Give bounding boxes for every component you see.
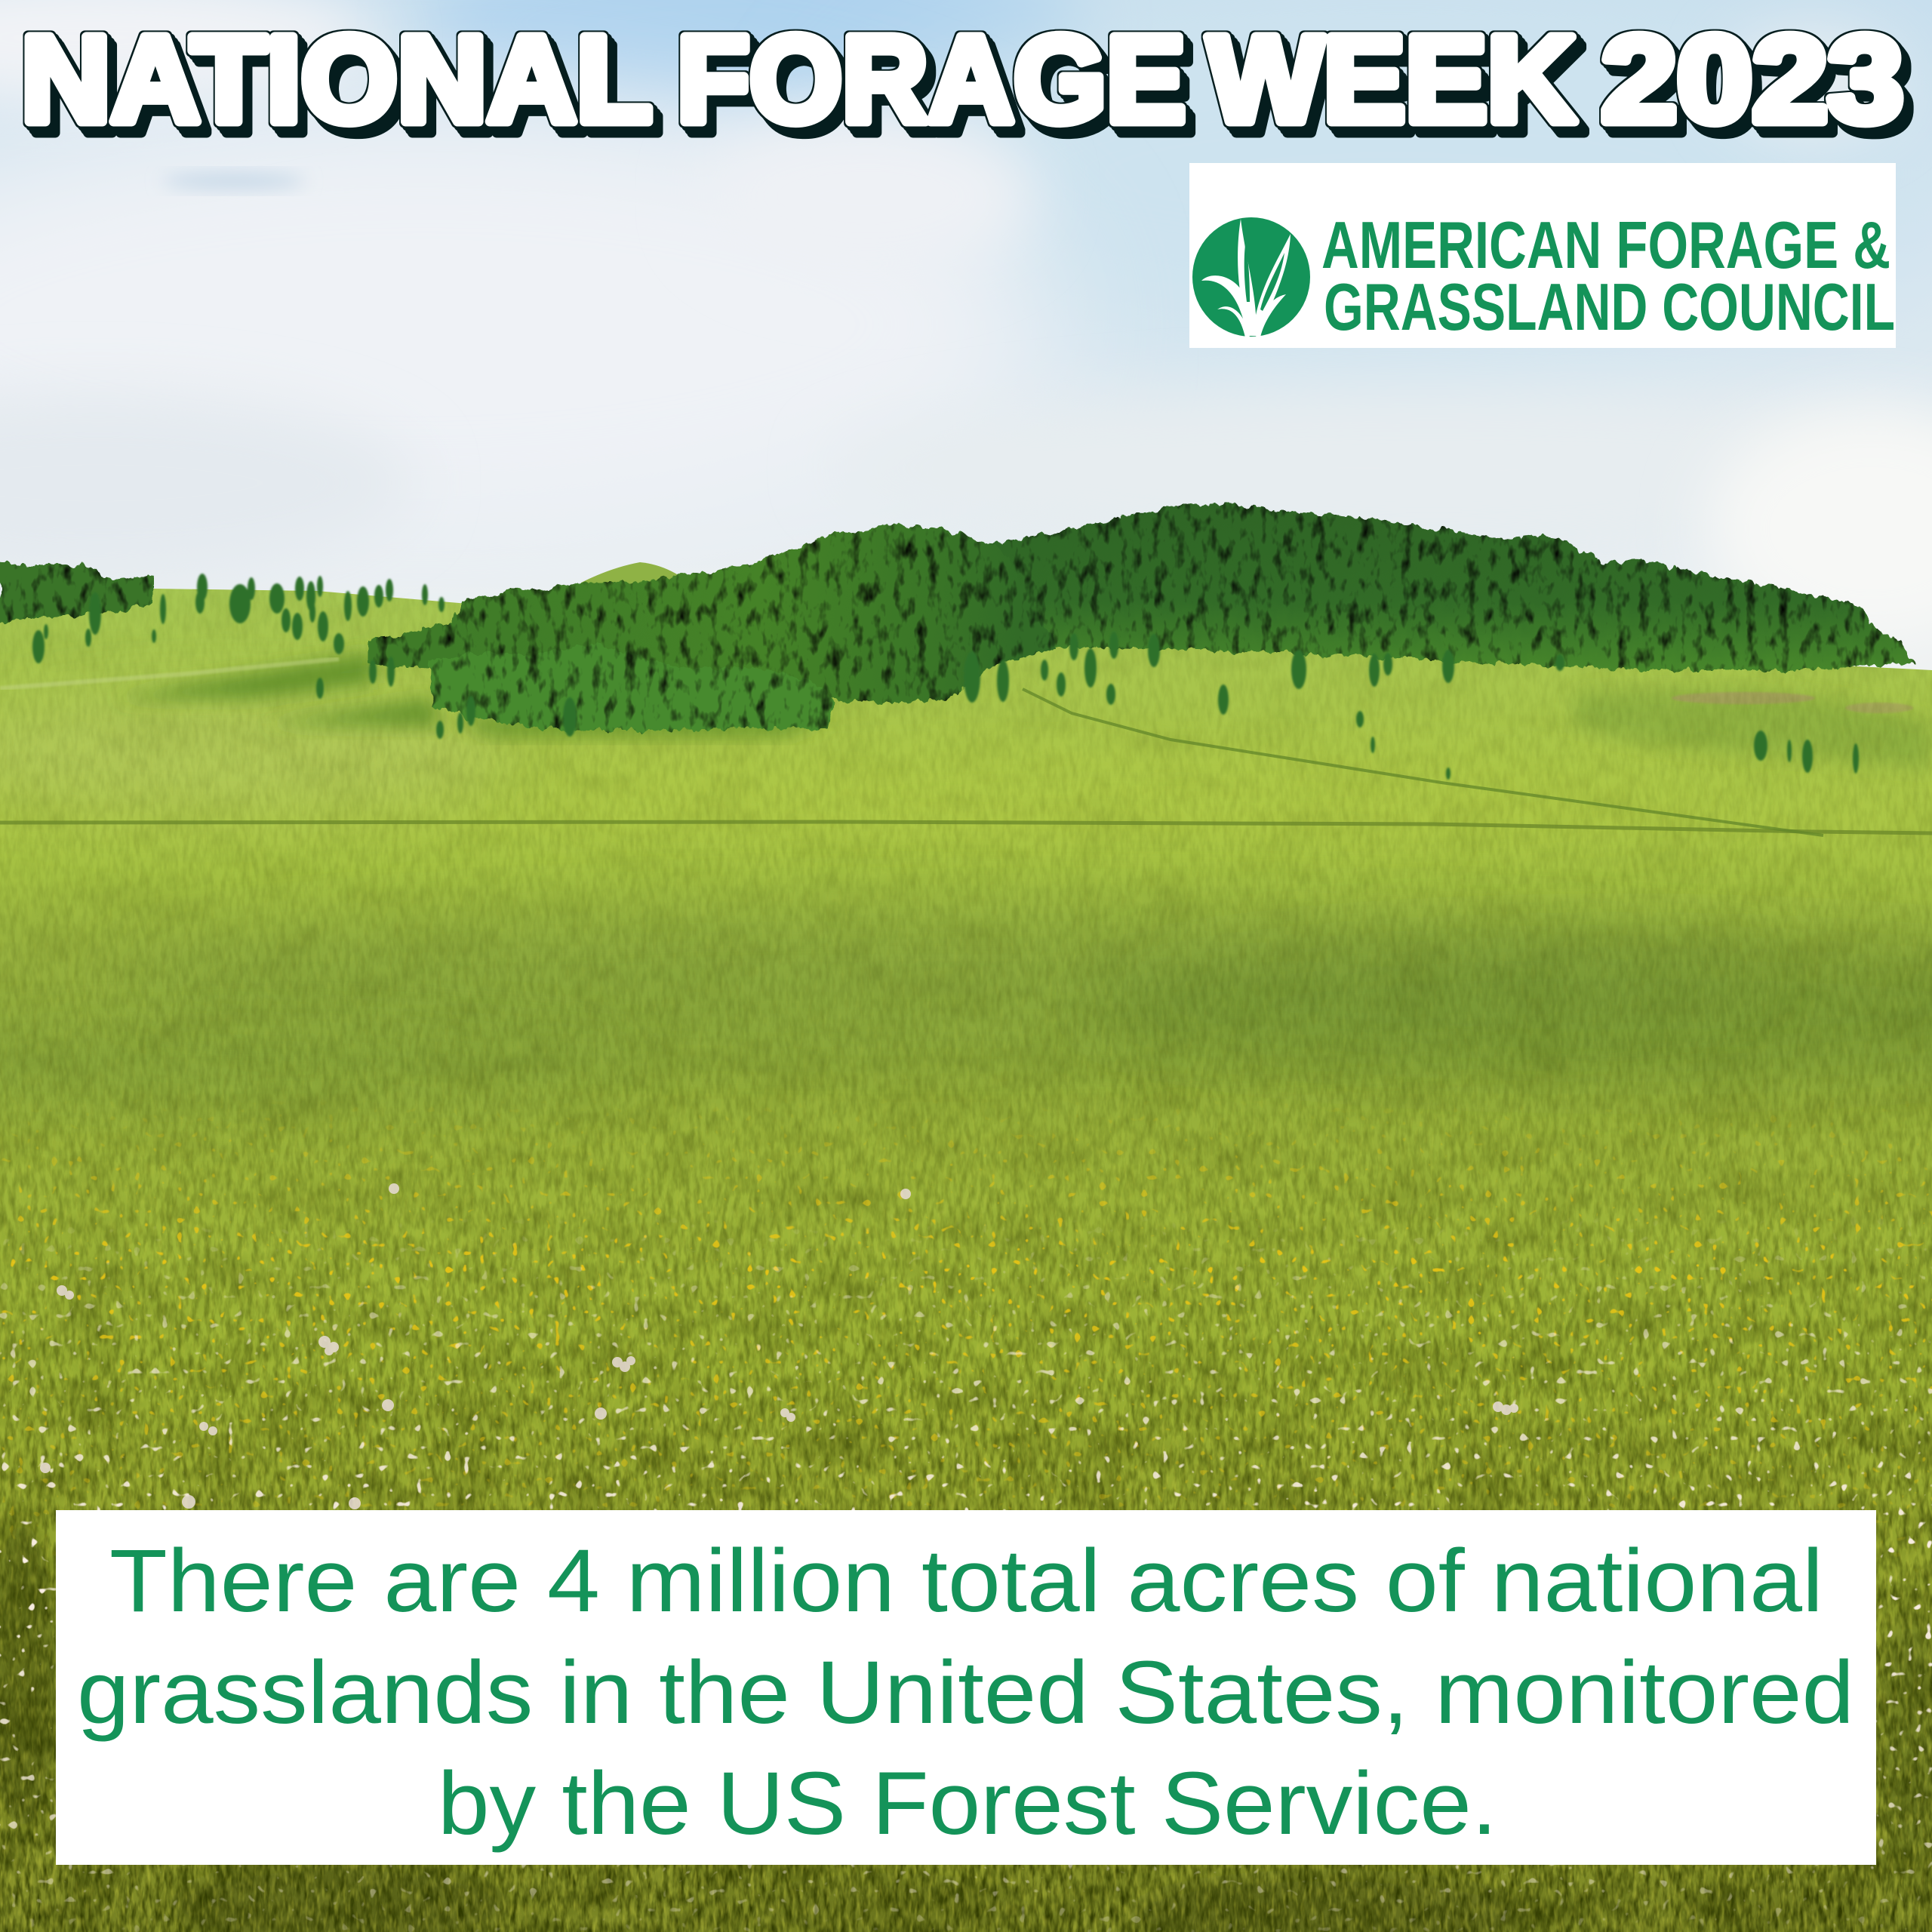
caption text: grasslands in the United States, monitored xyxy=(77,1643,1854,1743)
title: FORAGE xyxy=(677,10,1186,148)
small distant hill xyxy=(581,562,685,611)
hill shadows and field trails xyxy=(0,653,1932,835)
caption panel xyxy=(56,1510,1876,1865)
caption text xyxy=(77,1531,1854,1854)
logo panel: American Forage & Grassland Council xyxy=(1189,163,1896,348)
wildflower clusters xyxy=(40,1183,1518,1509)
front tree cluster xyxy=(430,644,836,731)
sky with clouds xyxy=(0,0,1932,679)
logo wordmark xyxy=(1321,208,1895,344)
forest on main hill xyxy=(958,502,1915,670)
title: WEEK xyxy=(1208,10,1576,148)
icon: green circle with grass blades xyxy=(1192,217,1310,337)
far left tree line xyxy=(0,562,155,623)
caption text: There are 4 million total acres of national xyxy=(109,1531,1823,1631)
grass field xyxy=(0,581,1932,1932)
title: 2023 xyxy=(1601,10,1903,148)
caption text: by the US Forest Service. xyxy=(438,1754,1497,1854)
forest on left slope xyxy=(370,525,1057,706)
scattered individual trees xyxy=(32,574,1859,780)
title: NATIONAL xyxy=(21,10,652,148)
title xyxy=(21,10,1914,148)
